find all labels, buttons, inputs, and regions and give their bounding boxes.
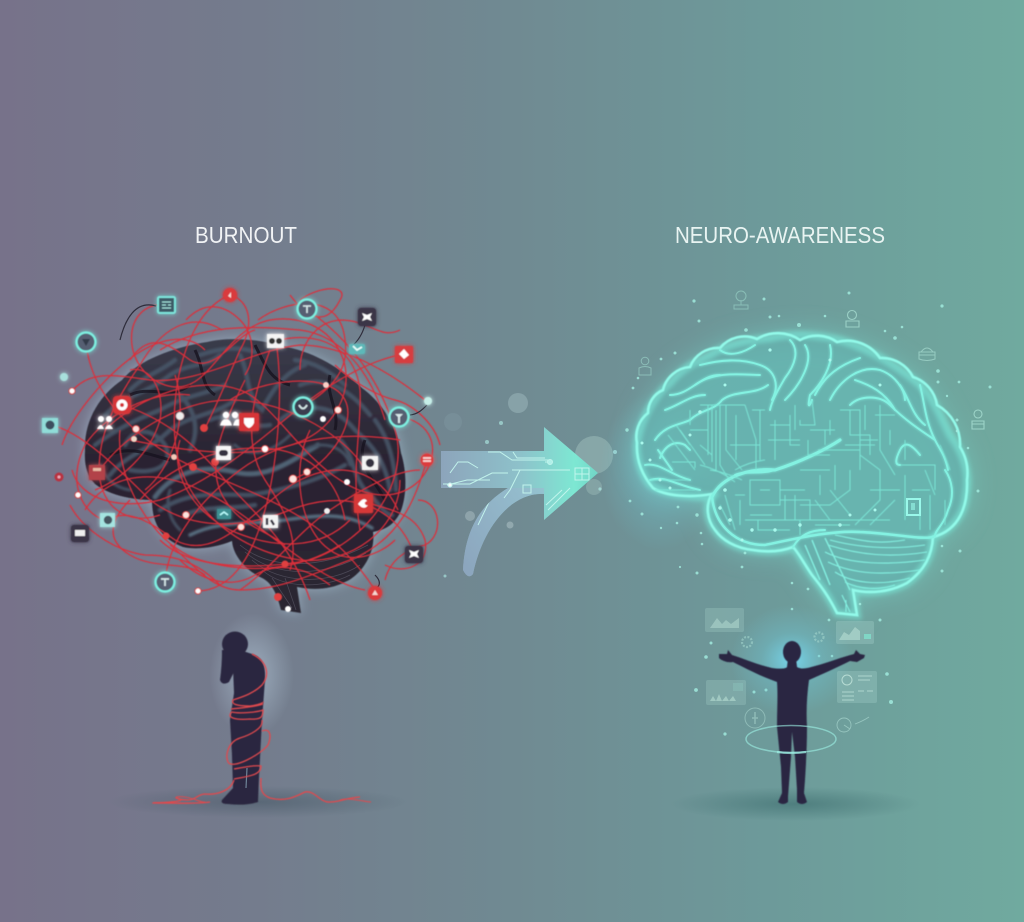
icon: pale node [60, 373, 68, 381]
icon: teal square lower [100, 513, 115, 527]
arrow circuit traces [443, 452, 590, 526]
icon: people center [220, 412, 243, 426]
brain outline [636, 333, 967, 615]
blue haze left of brain [600, 390, 720, 550]
icon: red shield [239, 413, 259, 431]
outline icon: device [919, 348, 935, 360]
brain sparkle dots [640, 348, 882, 542]
brain silhouette [85, 339, 405, 613]
arrow tail shade [463, 488, 544, 576]
red and white nodes [54, 382, 350, 612]
gyri and sulci [645, 340, 952, 547]
neuro-awareness figure [670, 605, 920, 821]
icon: red circle [223, 288, 237, 302]
icon: red target [113, 396, 131, 414]
brain fill and outline glow [637, 335, 967, 615]
red thread [153, 654, 371, 803]
icon: ring left [76, 332, 96, 352]
icon: teal badge lower [217, 509, 231, 519]
floating bubbles [444, 393, 617, 578]
icon: muted red square [89, 465, 105, 480]
icon: red node right [420, 454, 434, 466]
outline stopwatch icon [837, 717, 869, 732]
aura ring [746, 726, 836, 753]
silhouette [719, 641, 865, 804]
icon: teal bubble [42, 418, 58, 433]
cerebellum lines [240, 545, 368, 610]
icon: white square right [362, 456, 378, 470]
icon: ring lower [156, 572, 174, 592]
icon: red heart square [354, 494, 373, 513]
tangled red wires [50, 289, 440, 600]
icon: dark square [358, 308, 376, 326]
cerebellum lines [805, 535, 927, 612]
outline icon: person left [639, 357, 651, 375]
chip square [907, 499, 920, 515]
brain dark creases [110, 345, 385, 500]
compass icon [745, 708, 765, 728]
scattered particles around right brain [625, 292, 992, 736]
brain glow [637, 335, 967, 615]
icon: teal ring [298, 300, 316, 318]
outline icon: lightbulb top [734, 291, 748, 309]
icon: ring right [390, 408, 408, 426]
data panel: top left [705, 608, 744, 632]
transition arrow [441, 393, 617, 578]
gear icons [742, 632, 824, 647]
outline icon: person top [846, 310, 859, 327]
icon: ring center [294, 398, 312, 416]
icon layer [42, 288, 434, 600]
burnout figure wrapped in red thread [108, 613, 408, 818]
outline icon: person right [972, 410, 984, 429]
icon: red circle lower [368, 586, 382, 600]
heading: neuro-awareness: NEURO-AWARENESS [675, 222, 885, 248]
icon: white square lower [263, 515, 278, 528]
icon: small teal badge [349, 344, 365, 354]
neuro-awareness brain [600, 333, 967, 615]
silhouette [220, 632, 265, 805]
leg gap [246, 768, 247, 788]
data panel: bottom left [706, 680, 746, 705]
dark cable accents [120, 305, 427, 590]
data panel: bottom right [837, 671, 877, 703]
icon: people left [97, 416, 113, 429]
burnout brain with tangled wires [42, 288, 440, 613]
heading: burnout: BURNOUT [195, 222, 297, 248]
icon: pale node right [424, 397, 432, 405]
arrow shape [441, 427, 598, 576]
brain folds [95, 349, 396, 535]
icon: teal square [158, 297, 175, 313]
circuit traces [650, 400, 950, 535]
data panel: top right [836, 621, 874, 644]
icon: dark square lower right [405, 546, 423, 563]
icon: white square center [216, 446, 231, 460]
icon: red square [395, 346, 413, 363]
icon: dark square lower left [71, 525, 89, 542]
icon: white square top [267, 334, 284, 348]
